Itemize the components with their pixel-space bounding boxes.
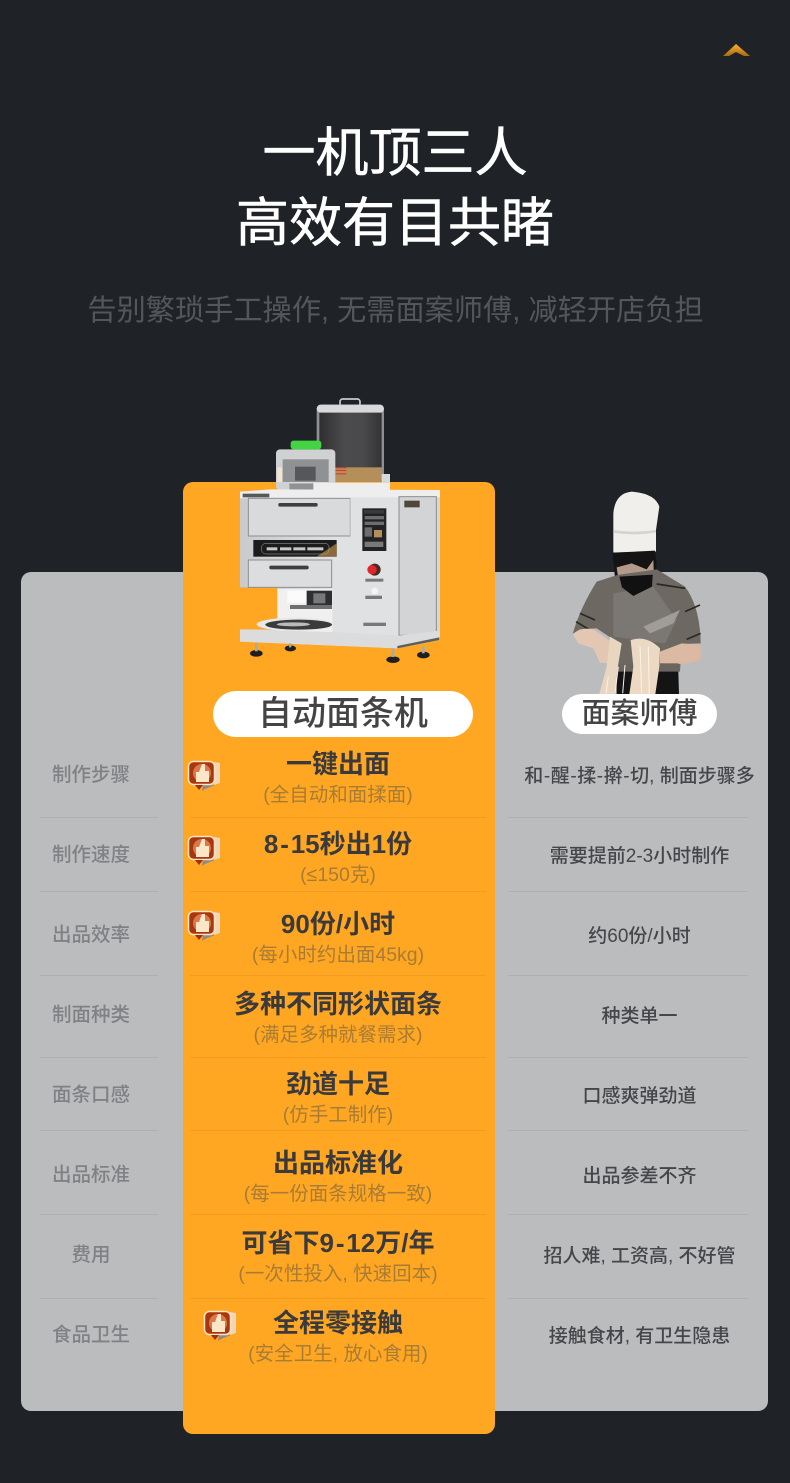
row chef text: 需要提前2-3小时制作 <box>550 846 729 867</box>
row machine note: (≤150克) <box>300 864 376 886</box>
row machine heading: 8-15秒出1份: 8-15秒出1份 <box>264 829 412 859</box>
subtitle: 告别繁琐手工操作, 无需面案师傅, 减轻开店负担 <box>87 295 704 327</box>
row machine note: (每一份面条规格一致) <box>244 1183 432 1205</box>
row machine note: (一次性投入, 快速回本) <box>238 1263 438 1285</box>
row label: 费用: 费用 <box>71 1244 110 1266</box>
row label: 出品效率: 出品效率 <box>52 924 130 946</box>
banner <box>253 540 337 557</box>
image: automatic noodle machine <box>240 398 440 663</box>
row machine heading: 一键出面: 一键出面 <box>286 749 390 779</box>
row chef text: 出品参差不齐 <box>582 1166 696 1187</box>
row label: 食品卫生: 食品卫生 <box>52 1324 130 1346</box>
row machine heading: 可省下9-12万/年: 可省下9-12万/年 <box>242 1228 434 1258</box>
icon: thumbs up badge 1 <box>188 760 220 791</box>
panel: orange highlighted column <box>183 482 495 1434</box>
row label: 面条口感: 面条口感 <box>52 1084 130 1106</box>
row machine heading: 全程零接触: 全程零接触 <box>273 1308 403 1338</box>
row label: 制作步骤: 制作步骤 <box>52 764 130 786</box>
panel: gray comparison background <box>21 572 768 1411</box>
control panel <box>362 508 386 626</box>
base and feet <box>240 629 439 663</box>
row chef text: 约60份/小时 <box>588 926 691 947</box>
title: 一机顶三人 <box>262 124 528 183</box>
row machine note: (安全卫生, 放心食用) <box>248 1343 428 1365</box>
row machine note: (仿手工制作) <box>283 1104 393 1126</box>
title: 高效有目共睹 <box>236 194 554 253</box>
row label: 制作速度: 制作速度 <box>52 844 130 866</box>
row chef text: 接触食材, 有卫生隐患 <box>549 1326 730 1347</box>
row machine note: (满足多种就餐需求) <box>254 1024 422 1046</box>
label: noodle chef pill: 面案师傅 <box>581 698 698 730</box>
icon: thumbs up badge 3 <box>188 910 220 941</box>
icon: top chevron <box>723 44 750 56</box>
row chef text: 口感爽弹劲道 <box>582 1086 696 1107</box>
label: automatic noodle machine pill: 自动面条机 <box>258 695 428 733</box>
flour tank <box>317 399 384 482</box>
lower drawer and noodle outlet <box>248 560 333 632</box>
water bottle <box>276 441 335 490</box>
label: automatic noodle machine pill <box>213 691 473 737</box>
row machine heading: 劲道十足: 劲道十足 <box>286 1069 390 1099</box>
row machine heading: 出品标准化: 出品标准化 <box>273 1148 403 1178</box>
row machine heading: 90份/小时: 90份/小时 <box>281 909 395 939</box>
icon: thumbs up badge 4 <box>204 1310 236 1341</box>
icon: thumbs up badge 2 <box>188 836 220 866</box>
row label: 出品标准: 出品标准 <box>52 1164 130 1186</box>
image: noodle chef <box>572 492 701 694</box>
title <box>236 124 554 253</box>
row chef text: 招人难, 工资高, 不好管 <box>543 1246 736 1267</box>
side door <box>399 497 436 635</box>
row machine note: (每小时约出面45kg) <box>252 944 424 966</box>
label: noodle chef pill <box>562 694 717 734</box>
row chef text: 和-醒-揉-擀-切, 制面步骤多 <box>524 766 755 787</box>
row machine heading: 多种不同形状面条: 多种不同形状面条 <box>234 989 442 1019</box>
row machine note: (全自动和面揉面) <box>263 784 413 806</box>
machine body <box>240 489 440 648</box>
row chef text: 种类单一 <box>601 1006 678 1027</box>
row label: 制面种类: 制面种类 <box>52 1004 130 1026</box>
